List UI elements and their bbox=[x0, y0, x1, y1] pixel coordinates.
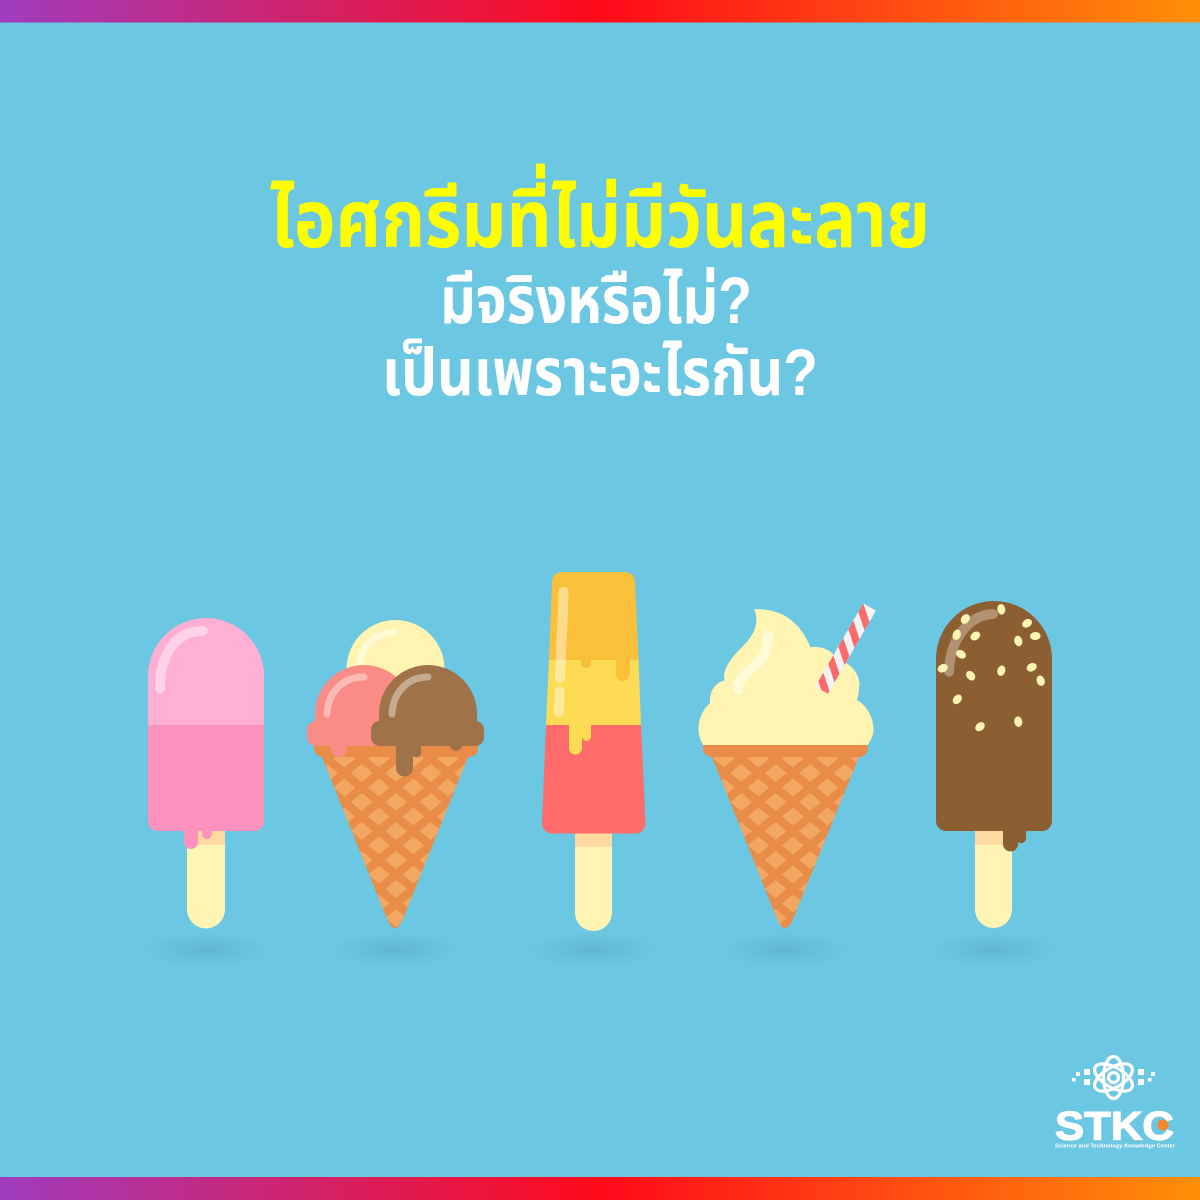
stick bbox=[187, 825, 225, 928]
chocolate highlight bbox=[392, 677, 428, 714]
pink popsicle bbox=[148, 618, 264, 928]
sesame seeds bbox=[936, 603, 1046, 733]
soft serve cone bbox=[698, 603, 876, 928]
orange section bbox=[549, 572, 638, 681]
triple scoop cone bbox=[307, 620, 484, 928]
ground shadows bbox=[142, 932, 1058, 968]
cream highlight bbox=[738, 635, 768, 690]
cone rim bbox=[703, 744, 868, 757]
strawberry scoop bbox=[307, 665, 413, 757]
logo wordmark: STKC bbox=[1055, 1104, 1174, 1148]
chocolate popsicle bbox=[936, 601, 1052, 928]
lower body bbox=[148, 725, 264, 849]
tricolor popsicle bbox=[542, 572, 646, 931]
logo orange dot bbox=[1158, 1120, 1168, 1130]
chocolate scoop bbox=[371, 665, 484, 776]
highlights bbox=[559, 592, 564, 712]
waffle cone bbox=[712, 757, 859, 928]
red section bbox=[542, 725, 646, 834]
striped straw bbox=[815, 603, 876, 694]
stick bbox=[575, 825, 612, 931]
yellow section bbox=[546, 659, 641, 754]
title bbox=[270, 164, 930, 409]
STKC logo bbox=[1055, 1056, 1175, 1150]
title line 3: เป็นเพราะอะไรกัน? bbox=[382, 335, 818, 409]
highlight bbox=[949, 614, 993, 672]
stick shade bbox=[975, 825, 1012, 845]
icon: pixel squares bbox=[1072, 1069, 1155, 1085]
strawberry highlight bbox=[327, 677, 364, 714]
bottom gradient bar bbox=[0, 1177, 1200, 1200]
vanilla scoop bbox=[346, 620, 444, 718]
soft serve cream bbox=[698, 609, 874, 745]
stick bbox=[975, 825, 1012, 928]
vanilla highlight bbox=[359, 632, 395, 668]
title line 2: มีจริงหรือไม่? bbox=[440, 263, 752, 337]
chocolate body bbox=[936, 601, 1052, 852]
cone rim bbox=[314, 744, 478, 757]
highlight bbox=[160, 631, 203, 688]
stick shade bbox=[187, 825, 225, 845]
waffle cone bbox=[322, 757, 468, 928]
logo tagline: Science and Technology Knowledge Center bbox=[1055, 1144, 1175, 1150]
stick shade bbox=[575, 825, 612, 847]
icon: atom bbox=[1090, 1056, 1137, 1098]
top gradient bar bbox=[0, 0, 1200, 22]
title line 1: ไอศกรีมที่ไม่มีวันละลาย bbox=[270, 164, 930, 264]
upper dome bbox=[148, 618, 264, 725]
